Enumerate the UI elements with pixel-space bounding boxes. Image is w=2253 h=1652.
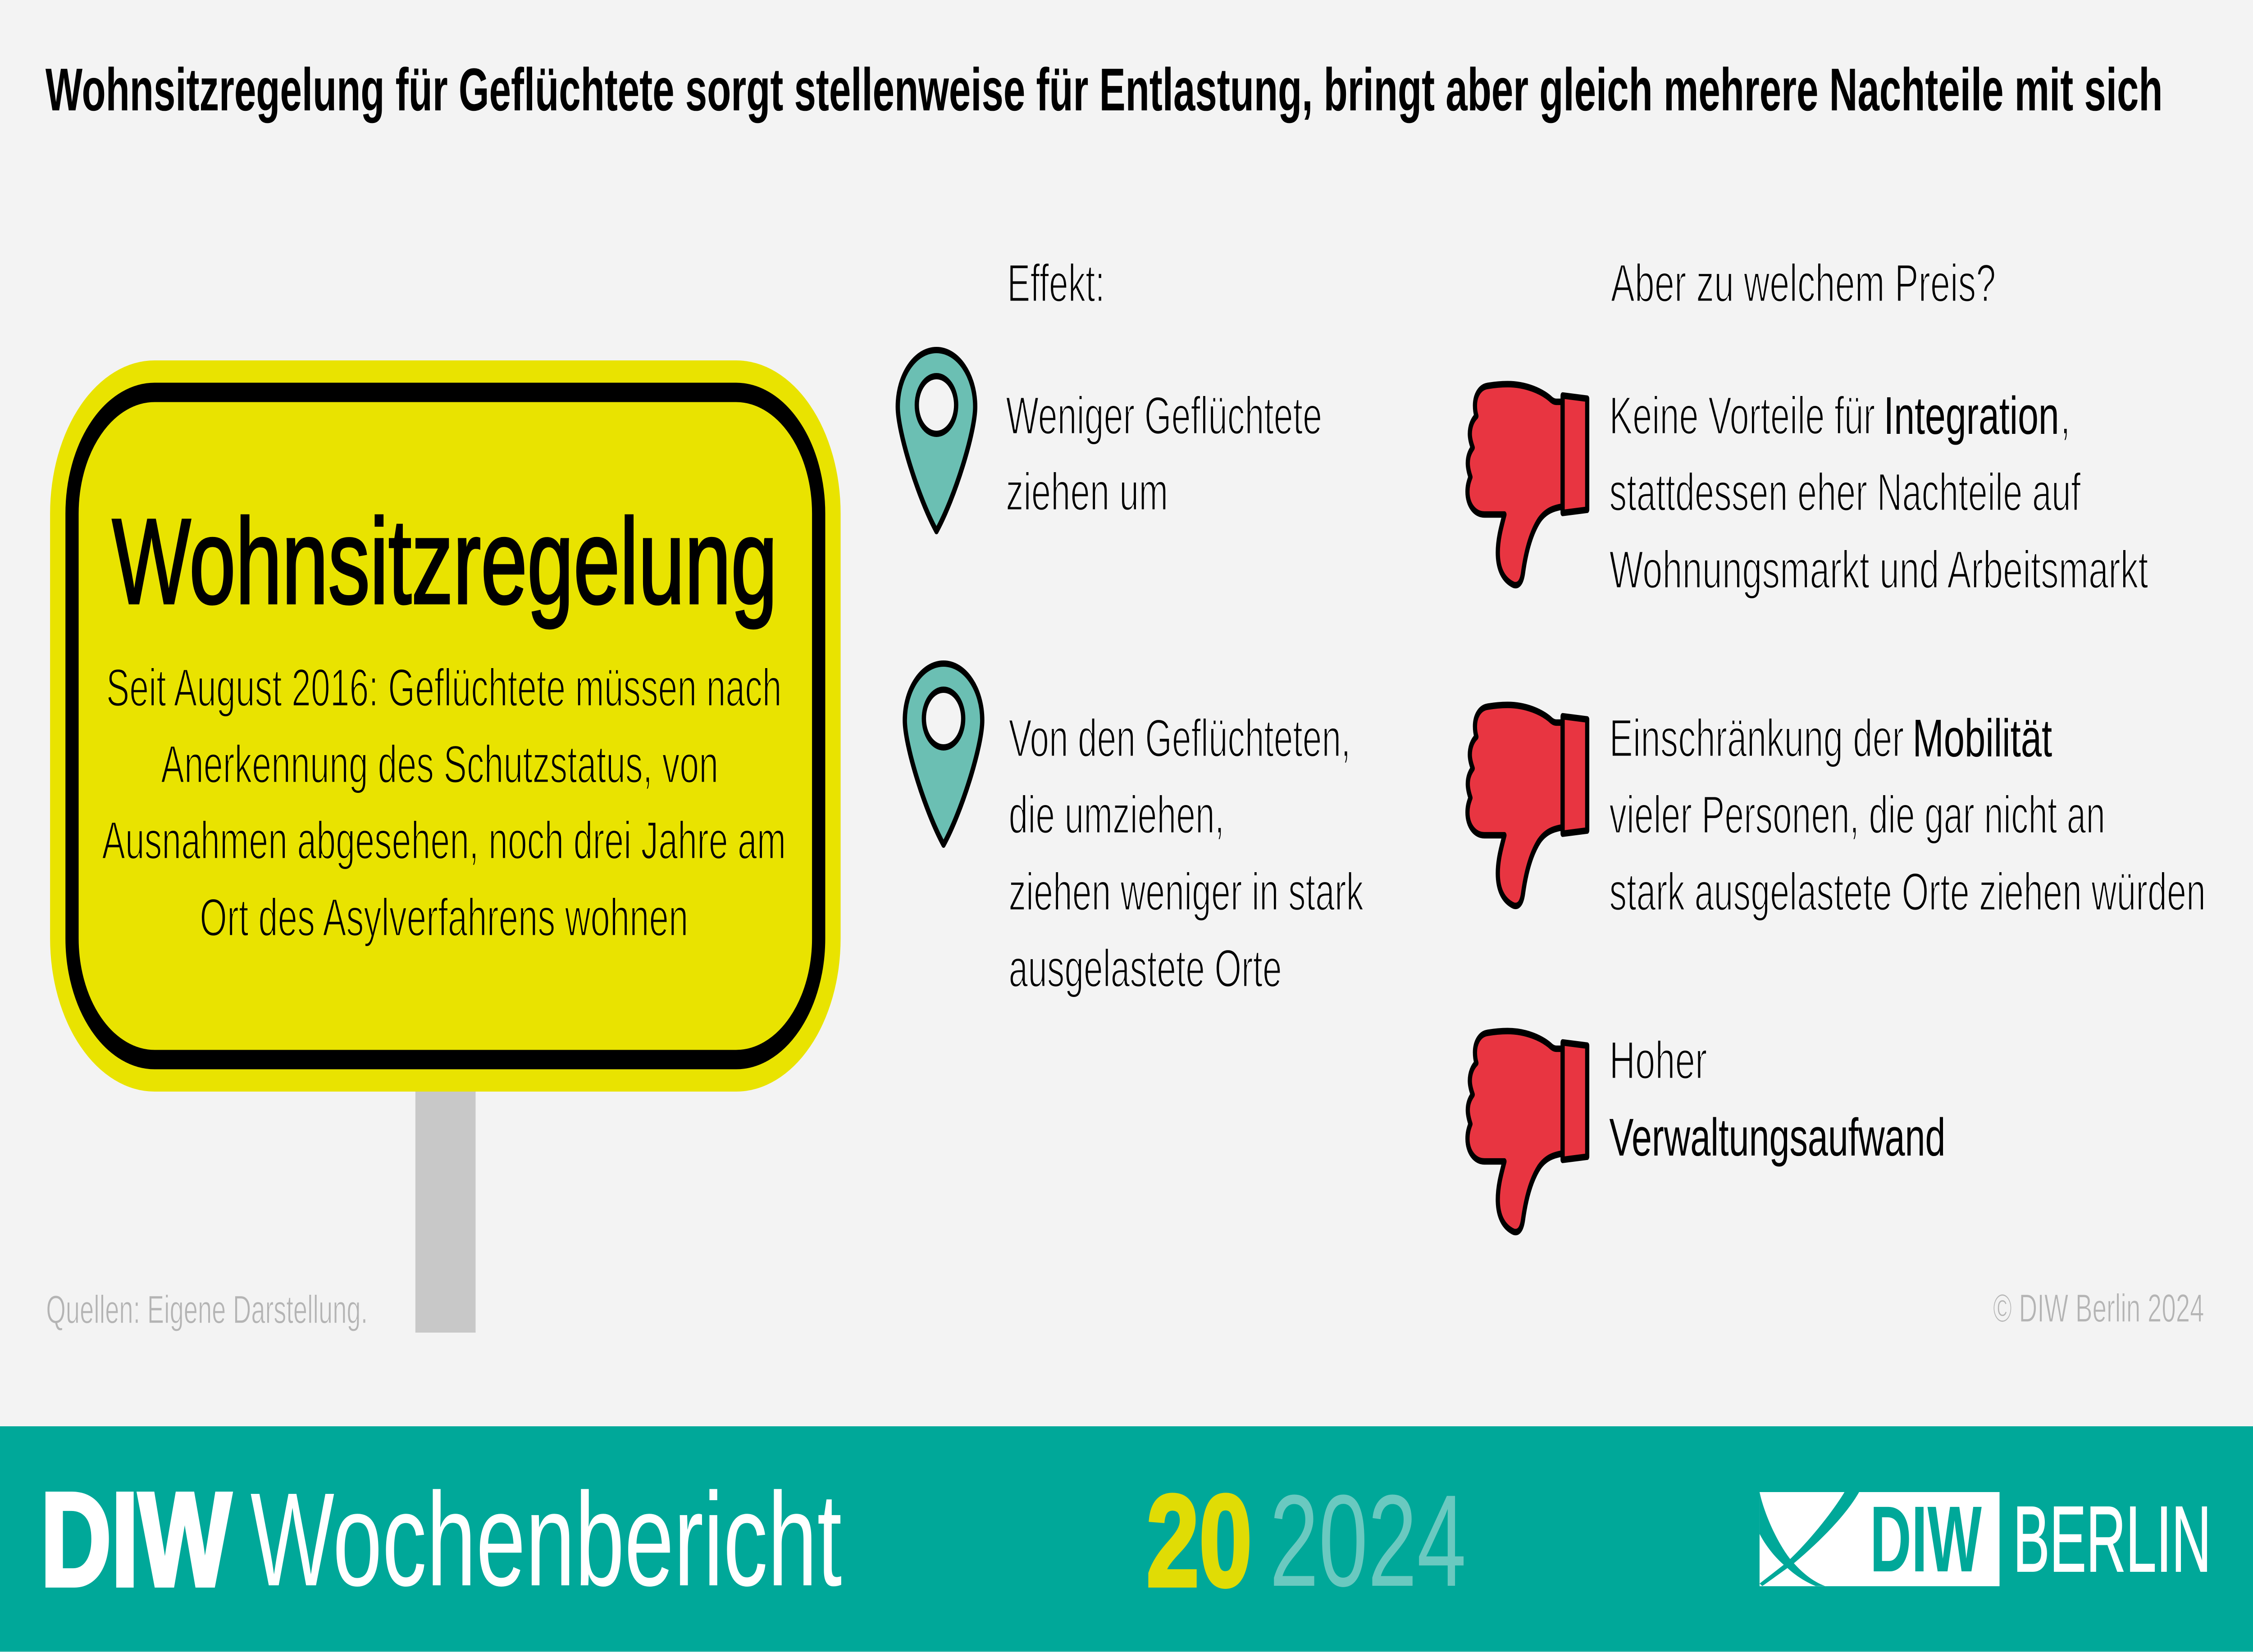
sign text: Ort des Asylverfahrens wohnen [200,888,688,947]
effect text 2 [1009,709,1364,998]
logo: DIW Berlin: DIW [1870,1487,1982,1592]
sign text [102,658,786,947]
effect text 2: die umziehen, [1009,785,1224,845]
effect text 2: Von den Geflüchteten, [1009,709,1350,768]
footer band [0,1426,2253,1652]
sign post [415,1092,476,1333]
icon: thumbs down 2 [1468,705,1587,906]
title: Wohnsitzregelung für Geflüchtete sorgt stellenweise für Entlastung, bringt aber gleich mehrere Nachteile mit sich [46,56,2163,123]
copyright: © DIW Berlin 2024 [1993,1286,2204,1330]
cost text 2: vieler Personen, die gar nicht an [1610,785,2105,845]
cost text 2: Einschränkung der [1610,709,1904,768]
cost text 3 [1610,1031,1945,1167]
cost text 3: Verwaltungsaufwand [1610,1108,1945,1167]
panel: town sign [50,360,841,1092]
cost text 2 [1610,709,2206,922]
cost text 1: , [2060,386,2071,446]
cost text 1: Keine Vorteile für [1610,386,1875,446]
sign text: Seit August 2016: Geflüchtete müssen nach [106,658,782,718]
logo: DIW Berlin: BERLIN [2013,1487,2211,1592]
icon: map pin 2 [905,664,982,845]
sign background [50,360,841,1092]
issue number: 20 [1146,1468,1252,1614]
issue number: 2024 [1269,1468,1466,1614]
heading: Preis: Aber zu welchem Preis? [1611,254,1996,313]
logo: DIW Berlin [1760,1487,2211,1592]
icon: thumbs down 1 [1468,384,1587,585]
cost text 3: Hoher [1610,1031,1707,1090]
publication name: DIW [41,1465,232,1614]
effect text 1 [1006,386,1322,522]
cost text 2: stark ausgelastete Orte ziehen würden [1610,862,2206,922]
sign text: Ausnahmen abgesehen, noch drei Jahre am [102,811,786,870]
effect text 1: Weniger Geflüchtete [1006,386,1322,446]
sign heading: Wohnsitzregelung [112,494,777,630]
effect text 2: ziehen weniger in stark [1009,862,1364,922]
effect text 1: ziehen um [1006,462,1168,522]
cost text 2: Mobilität [1913,709,2052,768]
sign border [72,392,819,1060]
cost text 1: Wohnungsmarkt und Arbeitsmarkt [1610,540,2148,600]
cost text 1 [1610,386,2148,600]
cost text 1: stattdessen eher Nachteile auf [1610,463,2081,522]
icon: map pin 1 [898,350,975,531]
icon: thumbs down 3 [1468,1031,1587,1232]
effect text 2: ausgelastete Orte [1009,939,1282,998]
issue number [1146,1468,1466,1614]
cost text 1: Integration [1884,386,2059,446]
source note: Quellen: Eigene Darstellung. [46,1287,368,1332]
publication name: Wochenbericht [251,1465,842,1614]
heading: Effekt: Effekt: [1007,254,1105,313]
sign text: Anerkennung des Schutzstatus, von [161,735,718,794]
